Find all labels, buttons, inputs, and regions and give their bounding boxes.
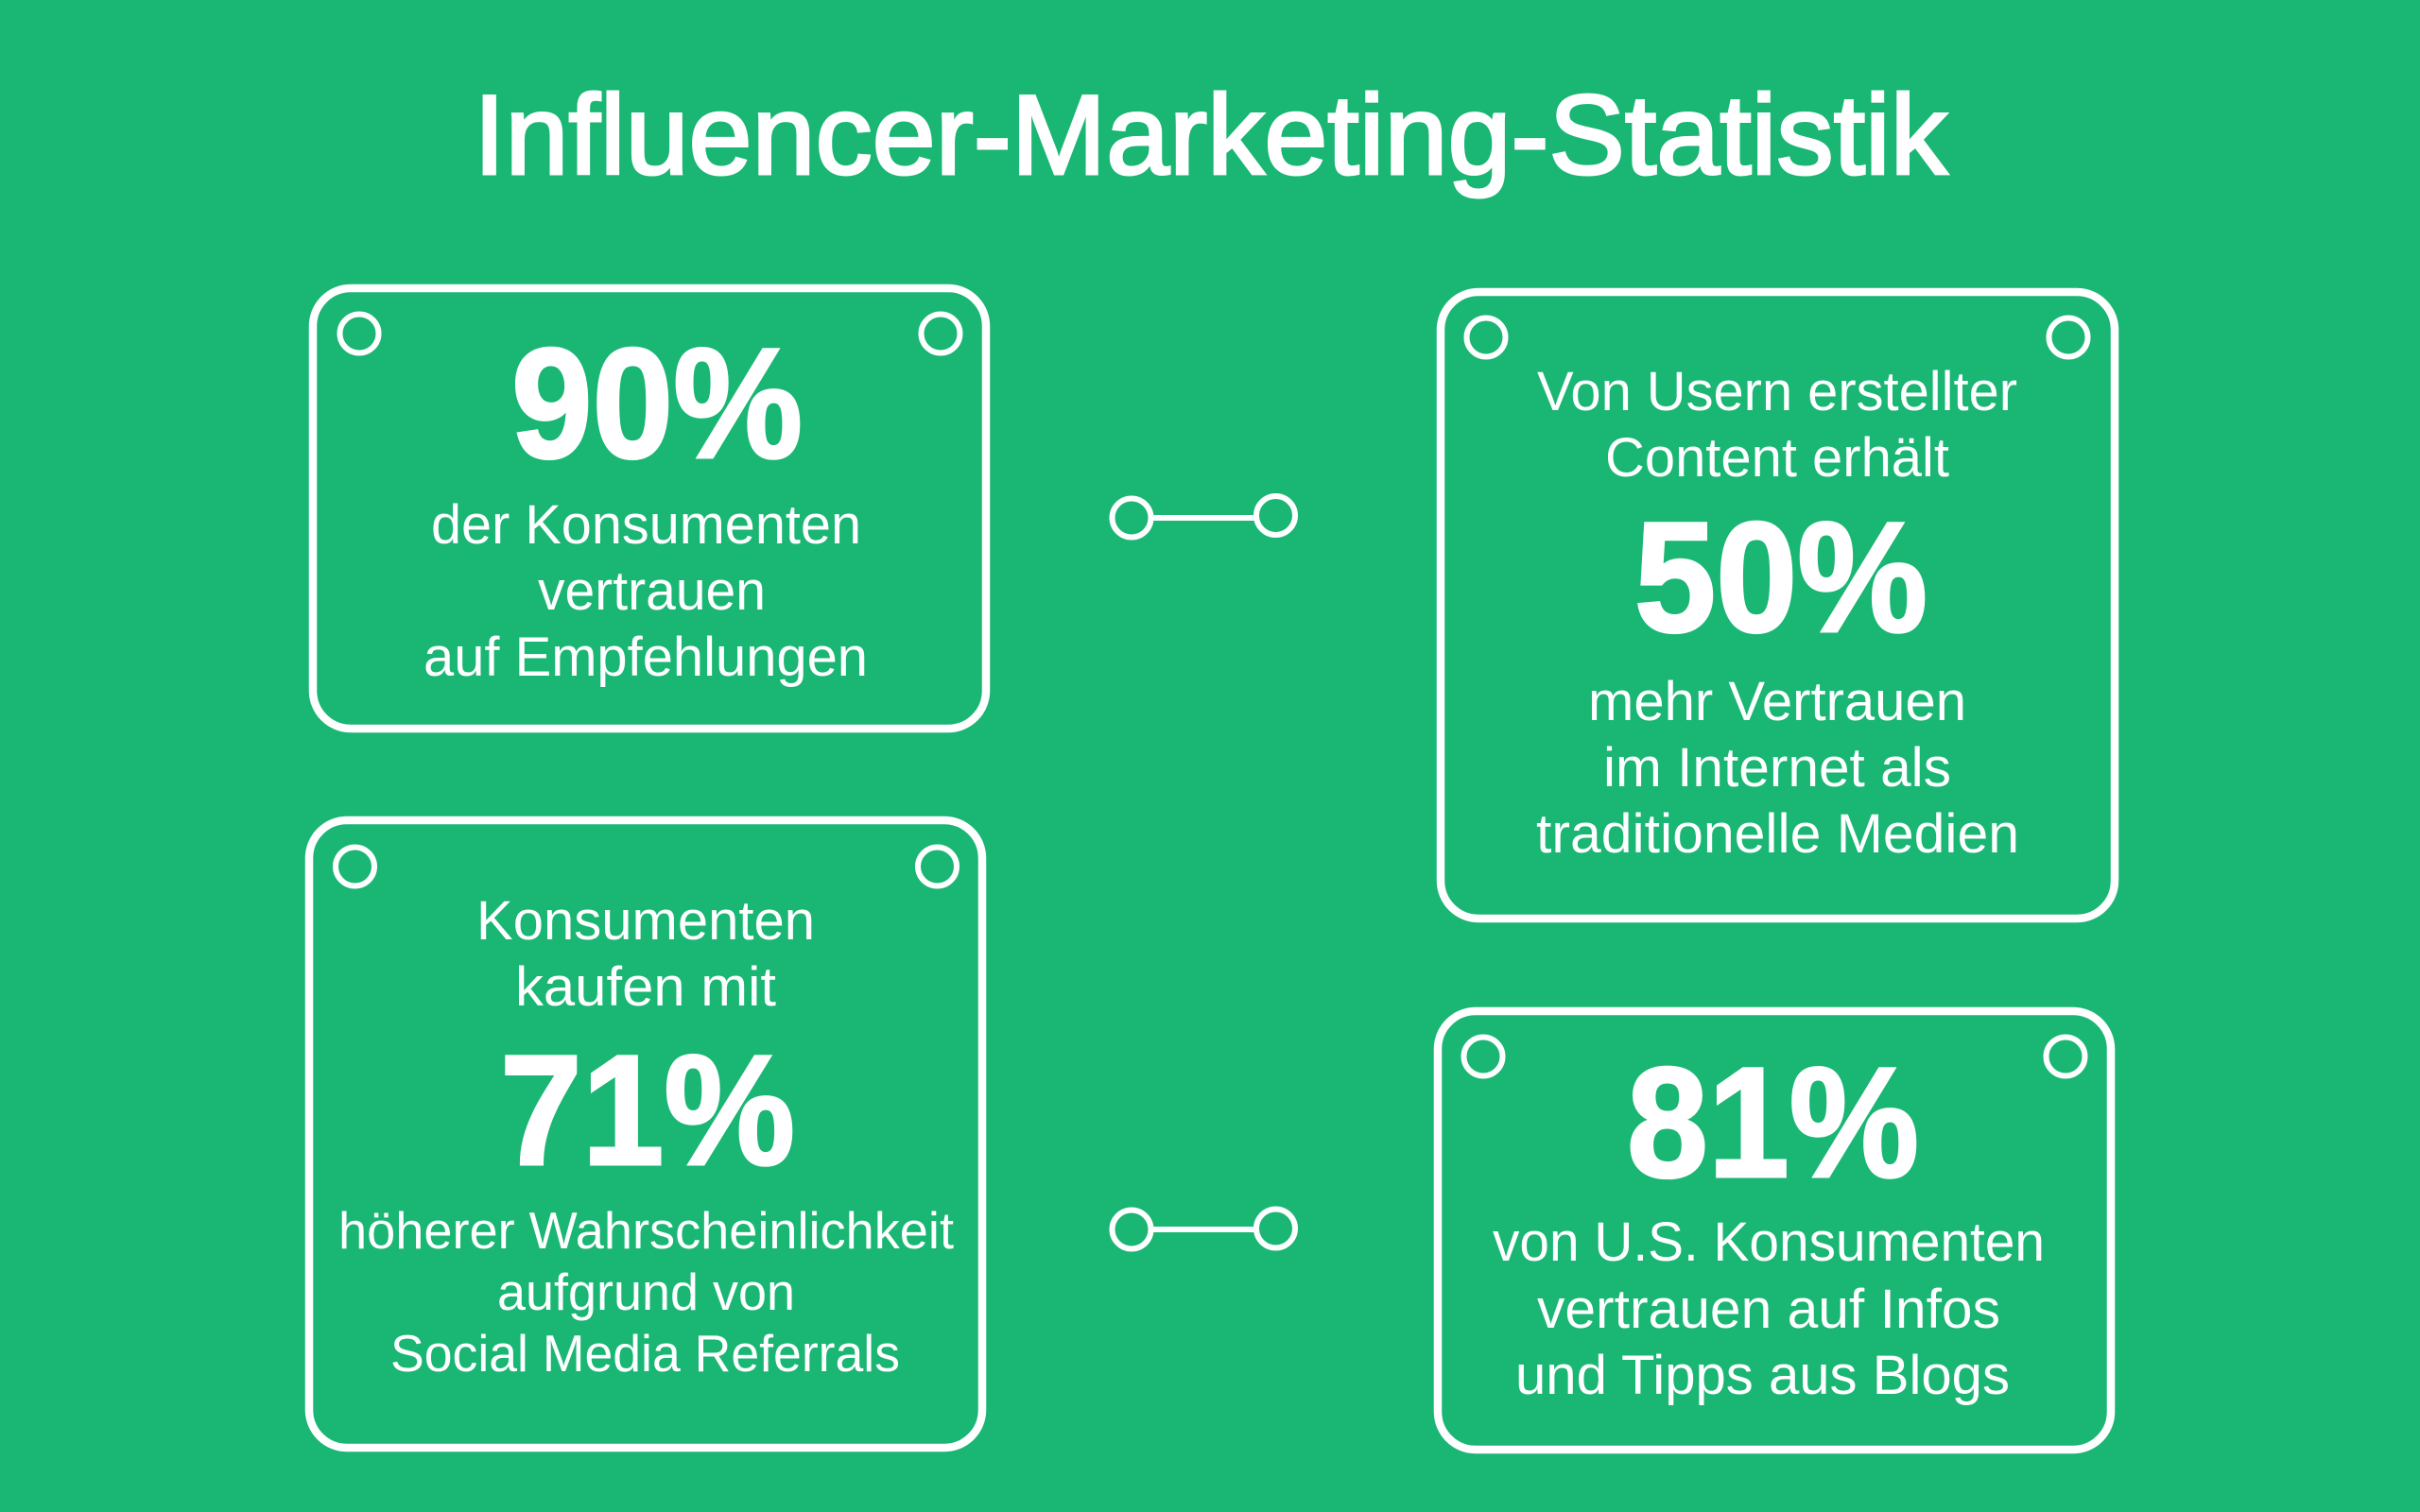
pin: top right <box>918 847 957 886</box>
text block: höherer Wahrscheinlichkeit aufgrund von Social Media Referrals: Social Media Referrals <box>390 1324 900 1383</box>
text block: mehr Vertrauen im Internet als traditionelle Medien: mehr Vertrauen <box>1588 671 1966 732</box>
text block: mehr Vertrauen im Internet als traditionelle Medien <box>1536 671 2019 865</box>
panel: Konsumenten kaufen mit 71% <box>309 820 982 1448</box>
panel frame <box>1438 1011 2111 1450</box>
text block: Konsumenten kaufen mit: kaufen mit <box>515 956 776 1018</box>
pin: top left <box>336 847 374 886</box>
text block: Von Usern erstellter Content erhält <box>1537 361 2017 489</box>
panel: 81% von U.S. Konsumenten <box>1438 1011 2111 1450</box>
pin: top right <box>2049 318 2087 357</box>
pin: top left <box>1463 1038 1503 1075</box>
big number: 90%: 90% <box>511 317 803 491</box>
text block: höherer Wahrscheinlichkeit aufgrund von Social Media Referrals: höherer Wahrscheinlichkeit <box>338 1201 954 1260</box>
panel: 50% mehr Vertrauen <box>1441 292 2115 919</box>
text block: der Konsumenten vertrauen auf Empfehlungen: der Konsumenten <box>431 494 861 556</box>
text block: von U.S. Konsumenten vertrauen auf Infos und Tipps aus Blogs: vertrauen auf Infos <box>1537 1279 2000 1340</box>
panel: 90% der Konsumenten <box>313 288 986 729</box>
pin: top left <box>1467 318 1505 357</box>
text block: mehr Vertrauen im Internet als traditionelle Medien: im Internet als <box>1603 737 1951 799</box>
text block: Von Usern erstellter Content erhält: Content erhält <box>1605 427 1949 489</box>
text block: Konsumenten kaufen mit <box>476 890 815 1018</box>
text block: Von Usern erstellter Content erhält: Von Usern erstellter <box>1537 361 2017 422</box>
connector: bottom <box>1112 1210 1295 1249</box>
text block: der Konsumenten vertrauen auf Empfehlungen <box>424 494 868 688</box>
panel frame <box>309 820 982 1448</box>
text block: von U.S. Konsumenten vertrauen auf Infos und Tipps aus Blogs: von U.S. Konsumenten <box>1493 1211 2045 1273</box>
pin: top right <box>921 314 960 353</box>
big number: 50%: 50% <box>1634 490 1927 665</box>
big number: 81%: 81% <box>1627 1036 1919 1211</box>
pin: top right <box>2046 1038 2085 1075</box>
connector: top <box>1112 496 1295 537</box>
text block: der Konsumenten vertrauen auf Empfehlungen: auf Empfehlungen <box>424 627 868 688</box>
text block: mehr Vertrauen im Internet als traditionelle Medien: traditionelle Medien <box>1536 803 2019 865</box>
panel frame <box>313 288 986 729</box>
panel frame <box>1441 292 2115 919</box>
text block: von U.S. Konsumenten vertrauen auf Infos und Tipps aus Blogs <box>1493 1211 2045 1406</box>
text block: höherer Wahrscheinlichkeit aufgrund von Social Media Referrals <box>338 1201 954 1383</box>
text block: der Konsumenten vertrauen auf Empfehlungen: vertrauen <box>538 560 766 622</box>
title: Influencer-Marketing-Statistik <box>474 72 1948 198</box>
pin: top left <box>340 314 378 353</box>
text block: von U.S. Konsumenten vertrauen auf Infos und Tipps aus Blogs: und Tipps aus Blogs <box>1515 1345 2010 1406</box>
big number: 71%: 71% <box>500 1023 795 1198</box>
text block: Konsumenten kaufen mit: Konsumenten <box>476 890 815 952</box>
text block: höherer Wahrscheinlichkeit aufgrund von Social Media Referrals: aufgrund von <box>497 1263 795 1321</box>
